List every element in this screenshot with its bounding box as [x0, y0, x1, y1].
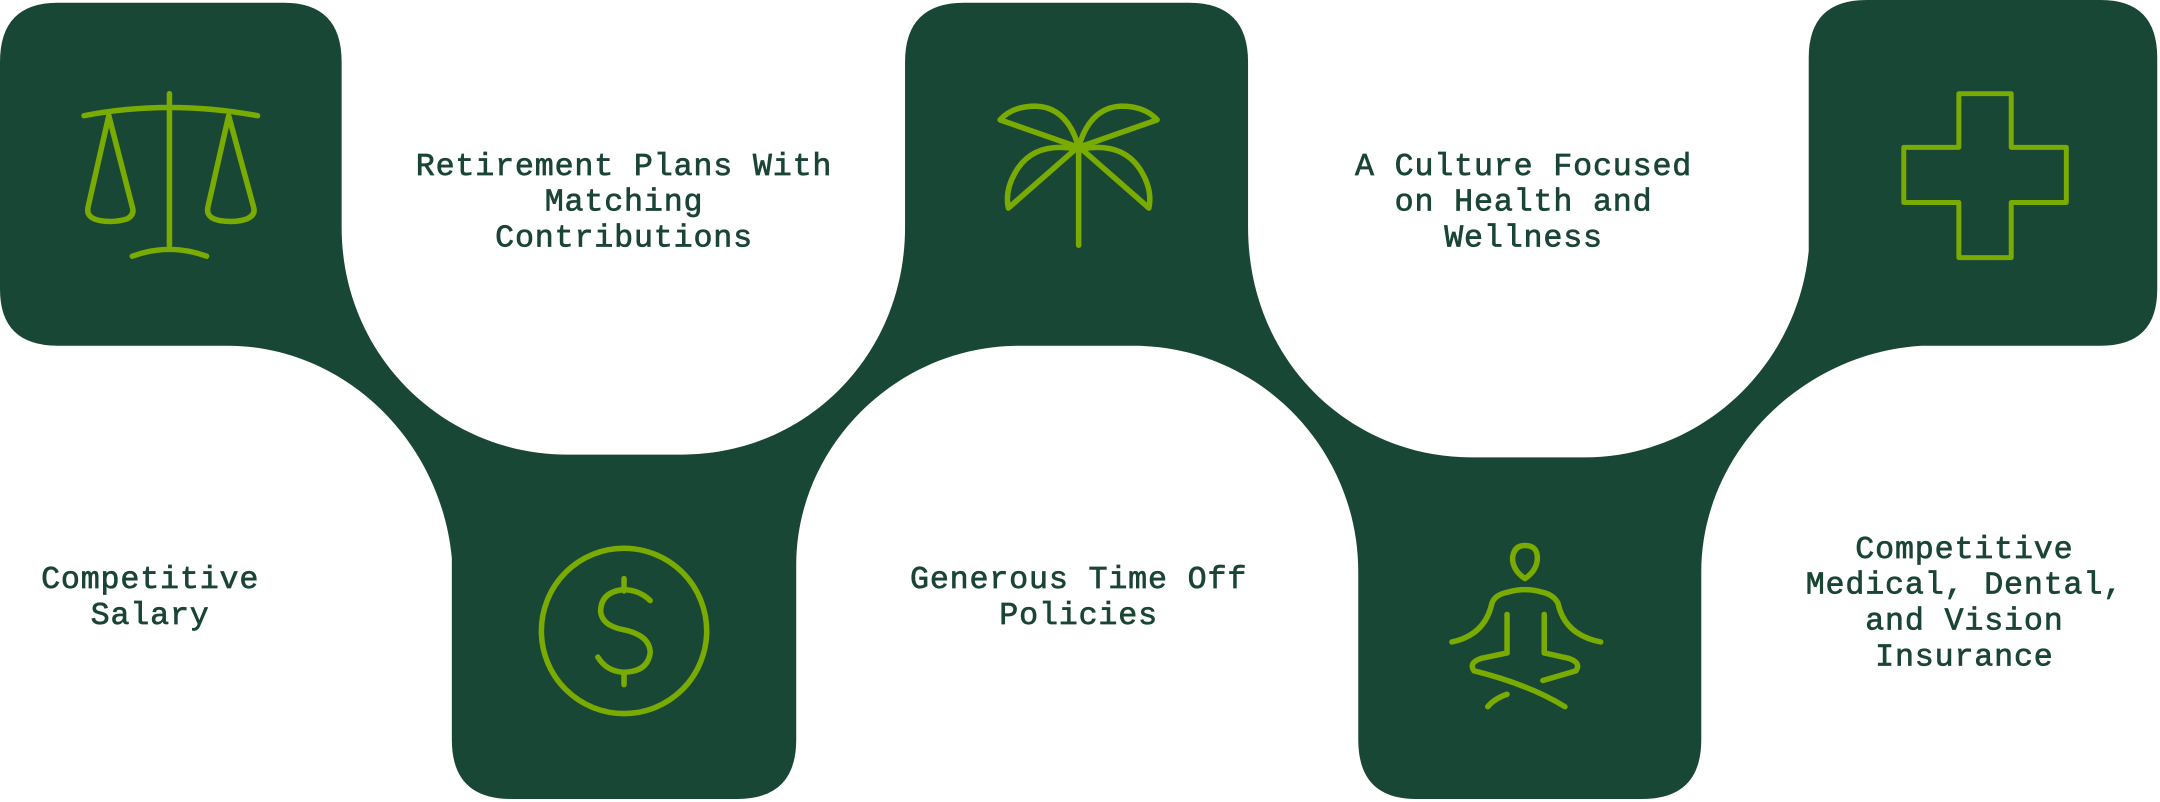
- text: Insurance: [1806, 532, 2123, 675]
- text: Time Off: Policies: [999, 598, 1158, 634]
- text: Retirement Plans: [416, 149, 832, 257]
- text: Retirement Plans: Retirement Plans With: [416, 149, 832, 185]
- text: Competitive Salary: Competitive: [41, 562, 259, 598]
- icon: medical cross: [1904, 94, 2066, 258]
- icon: meditation: [1452, 546, 1601, 707]
- text: Competitive Salary: Salary: [91, 598, 210, 634]
- text: Culture: [1355, 149, 1692, 257]
- text: Competitive Salary: [41, 562, 259, 634]
- text: Insurance: Insurance: [1875, 639, 2054, 675]
- text: Retirement Plans: Matching: [545, 185, 703, 221]
- icon: dollar coin: [541, 548, 707, 714]
- icon: palm tree: [1000, 106, 1157, 245]
- text: Culture: Wellness: [1444, 221, 1603, 257]
- text: Culture: on Health and: [1395, 185, 1652, 221]
- text: Insurance: and Vision: [1865, 604, 2064, 640]
- text: Insurance: Competitive: [1855, 532, 2073, 568]
- text: Insurance: Medical, Dental,: [1806, 568, 2123, 604]
- icon: scales: [84, 94, 258, 256]
- text: Culture: A Culture Focused: [1355, 149, 1692, 185]
- text: Retirement Plans: Contributions: [495, 221, 753, 257]
- text: Time Off: Generous Time Off: [910, 562, 1247, 598]
- text: Time Off: [910, 562, 1247, 634]
